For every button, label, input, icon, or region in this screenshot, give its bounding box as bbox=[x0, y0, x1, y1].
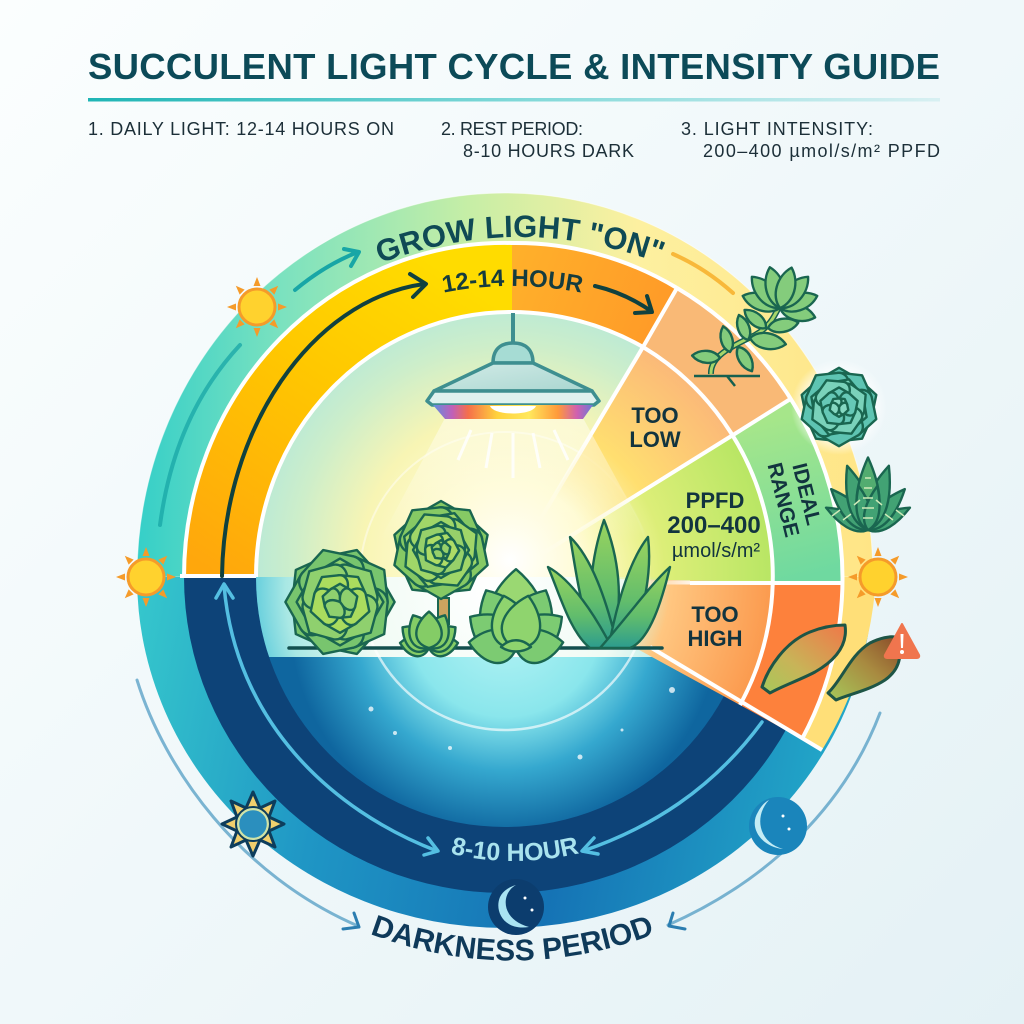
plant: striped haworthia bbox=[823, 458, 913, 537]
wedge: too low inner bbox=[505, 347, 733, 577]
navy darkness band bbox=[184, 261, 826, 893]
lamp bbox=[427, 313, 599, 419]
plant: scorched leaf 1 bbox=[762, 625, 845, 693]
icon: warning triangle bbox=[885, 624, 919, 658]
8-10 hour label: 8-10 HOUR bbox=[452, 838, 579, 861]
arrow: outer thin right to darkness label bbox=[668, 713, 880, 929]
arrow: light blue left into 8-10 hour bbox=[216, 584, 438, 855]
glow circle lower arc bbox=[360, 440, 650, 730]
plant: teal echeveria bbox=[791, 359, 887, 455]
arrow: dark up the 12-14 band bbox=[222, 274, 426, 576]
plant shelf bbox=[289, 646, 662, 650]
inner upper dome bbox=[256, 312, 773, 577]
wedge: too high inner bbox=[505, 577, 773, 705]
segment: too high outer bbox=[740, 582, 843, 739]
plant: tree stem bbox=[438, 598, 449, 624]
summary item 2: rest period: 8-10 HOURS DARK bbox=[463, 141, 634, 161]
vine stem bbox=[711, 305, 780, 374]
12-14 hour band: gold bbox=[184, 243, 512, 577]
cycle wheel bbox=[137, 193, 876, 928]
segment label: ideal range: RANGE bbox=[763, 460, 803, 540]
12-14 hour label: 12-14 HOUR bbox=[442, 269, 582, 292]
plant: tree rosette bbox=[384, 493, 498, 607]
outer ring dash accent bbox=[673, 254, 733, 293]
icon: moon lower right bbox=[749, 797, 807, 855]
plant: stretched vine (too low) bbox=[692, 265, 820, 386]
vine ground bbox=[694, 376, 760, 386]
wedge: ppfd inner bbox=[505, 435, 773, 582]
icon: sun right bbox=[848, 547, 908, 607]
summary item 2: rest period bbox=[441, 119, 634, 161]
arrow: outer thin left to darkness label bbox=[137, 680, 359, 929]
inner horizon band bbox=[256, 577, 716, 657]
plant: small base rosette bbox=[395, 610, 463, 658]
icon: dim sun lower left bbox=[222, 792, 284, 856]
12-14 hour band: orange bbox=[512, 243, 677, 347]
segment label: too low: LOW bbox=[629, 427, 681, 452]
outer ring: darkness bbox=[137, 577, 873, 928]
segment label: too low: TOO bbox=[631, 403, 679, 428]
segment label: ppfd value: PPFD bbox=[686, 488, 744, 513]
summary item 3: light intensity: 200–400 µmol/s/m² PPFD bbox=[703, 141, 940, 161]
arrow: light blue right into 8-10 hour bbox=[582, 722, 762, 854]
icon: sun left bbox=[116, 547, 176, 607]
segment label: ideal range: IDEAL bbox=[787, 461, 825, 528]
segment: low outer bbox=[643, 288, 792, 435]
grow light on label: GROW LIGHT "ON" bbox=[376, 215, 666, 260]
summary item 3: light intensity bbox=[681, 119, 940, 161]
title rule bbox=[88, 98, 940, 102]
segment: ideal range outer bbox=[733, 398, 843, 583]
summary item 1: daily light: 1. DAILY LIGHT: 12-14 HOURS ON bbox=[88, 119, 394, 139]
plant: scorched leaf 2 bbox=[828, 637, 900, 700]
light beam bbox=[380, 418, 650, 540]
segment label: ppfd value: µmol/s/m² bbox=[672, 540, 760, 562]
darkness period label: DARKNESS PERIOD bbox=[372, 915, 652, 961]
title: SUCCULENT LIGHT CYCLE & INTENSITY GUIDE bbox=[88, 46, 940, 87]
white separators bbox=[180, 243, 843, 750]
summary item 3: light intensity: 3. LIGHT INTENSITY: bbox=[681, 119, 873, 139]
outer ring: grow light on bbox=[137, 193, 873, 577]
plant: rosette left bbox=[261, 522, 419, 682]
plant: lotus rosette bbox=[459, 569, 573, 665]
inner lower disc bbox=[256, 327, 754, 827]
segment label: too high: HIGH bbox=[688, 626, 742, 651]
night sparkles bbox=[368, 687, 675, 760]
summary item 2: rest period: 2. REST PERIOD: bbox=[441, 119, 583, 139]
arrow: teal to grow light label bbox=[295, 249, 359, 290]
segment label: too high: TOO bbox=[691, 602, 739, 627]
icon: moon bottom bbox=[488, 879, 544, 935]
icon: sun upper left bbox=[227, 277, 287, 337]
plant: aloe bbox=[548, 520, 670, 648]
segment label: ppfd value: 200–400 bbox=[667, 512, 761, 539]
glow circle upper arc bbox=[360, 432, 650, 577]
arrow: dark end of 12-14 band bbox=[595, 286, 652, 313]
outer ring: yellow lower right bbox=[505, 577, 876, 750]
arrow: teal along outer ring bbox=[160, 345, 240, 525]
